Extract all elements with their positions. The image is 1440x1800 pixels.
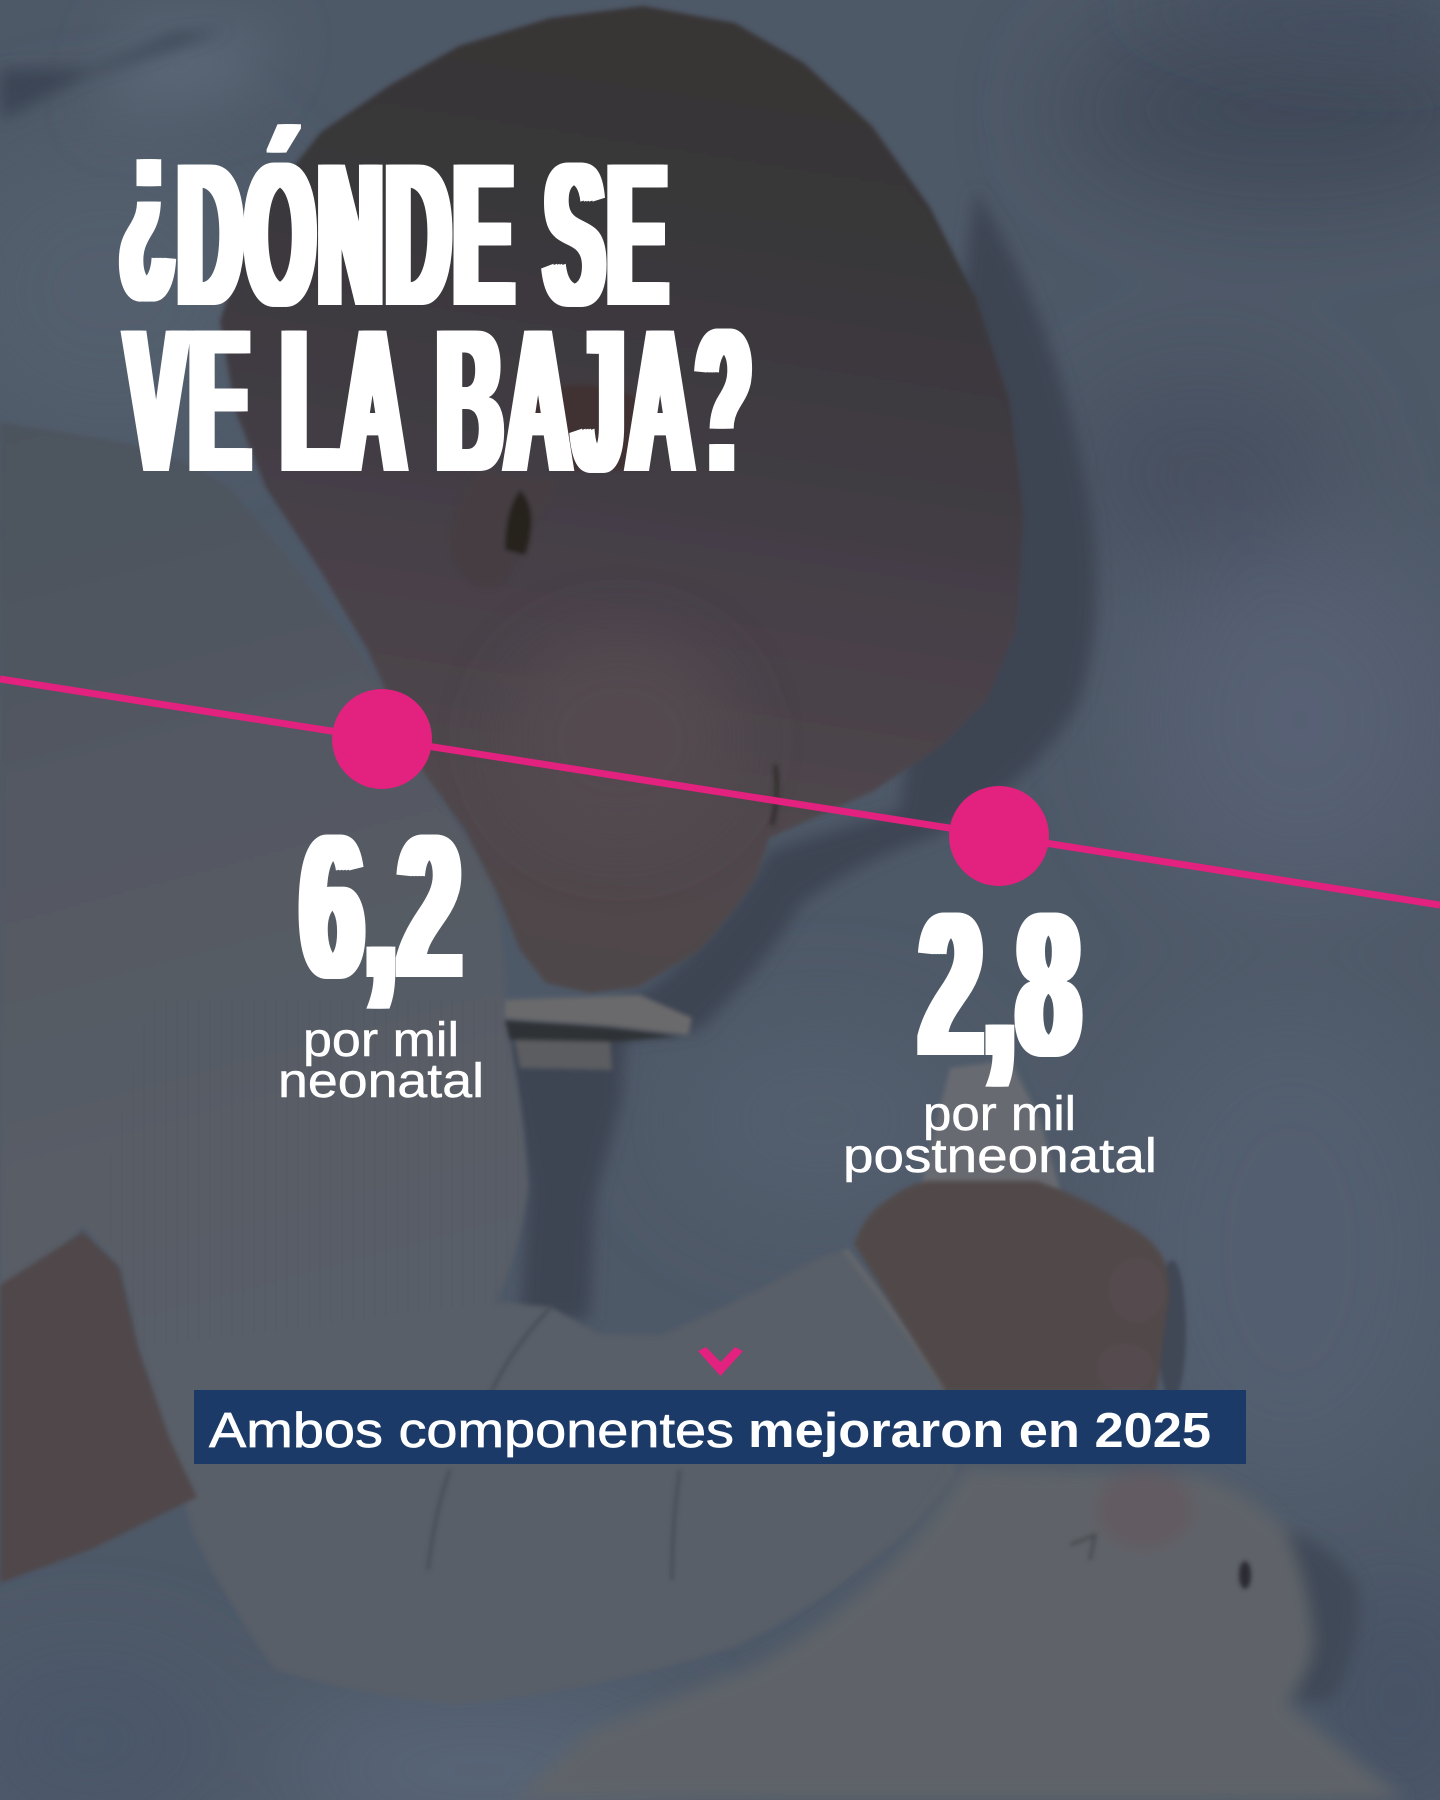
label: por mil postneonatal: por mil [923,1088,1076,1141]
right hand [854,1181,1186,1400]
data point: neonatal [332,689,432,789]
title [118,83,755,515]
ear and face creases [449,385,777,825]
title: VE LA BAJA? [126,287,755,515]
baby head [220,6,1024,993]
head shadow on bedding [500,190,1096,1320]
label: por mil postneonatal [843,1088,1157,1183]
left hand [0,1232,197,1583]
label: por mil neonatal: neonatal [278,1055,484,1108]
label: por mil neonatal [278,1014,484,1108]
data point: postneonatal [949,786,1049,886]
title: ¿DÓNDE SE [120,83,670,349]
callout banner [194,1390,1246,1464]
label: por mil postneonatal: postneonatal [843,1130,1157,1183]
callout banner: mejoraron en 2025 [748,1404,1211,1458]
label: por mil neonatal: por mil [303,1014,459,1067]
sleeve folds [428,1250,946,1580]
pacifier [505,995,692,1070]
baby body and sleeve [0,422,955,1704]
callout banner: Ambos componentes [209,1404,734,1458]
stuffed bunny [514,1468,1405,1800]
icon: chevron down [698,1347,743,1376]
value: 2,8: 2,8 [920,871,1082,1099]
fabric tip above hand [920,1060,1060,1190]
value: 6,2: 6,2 [301,793,463,1021]
bedding fold top left [0,29,230,120]
sweater ribbing [100,1000,528,1348]
